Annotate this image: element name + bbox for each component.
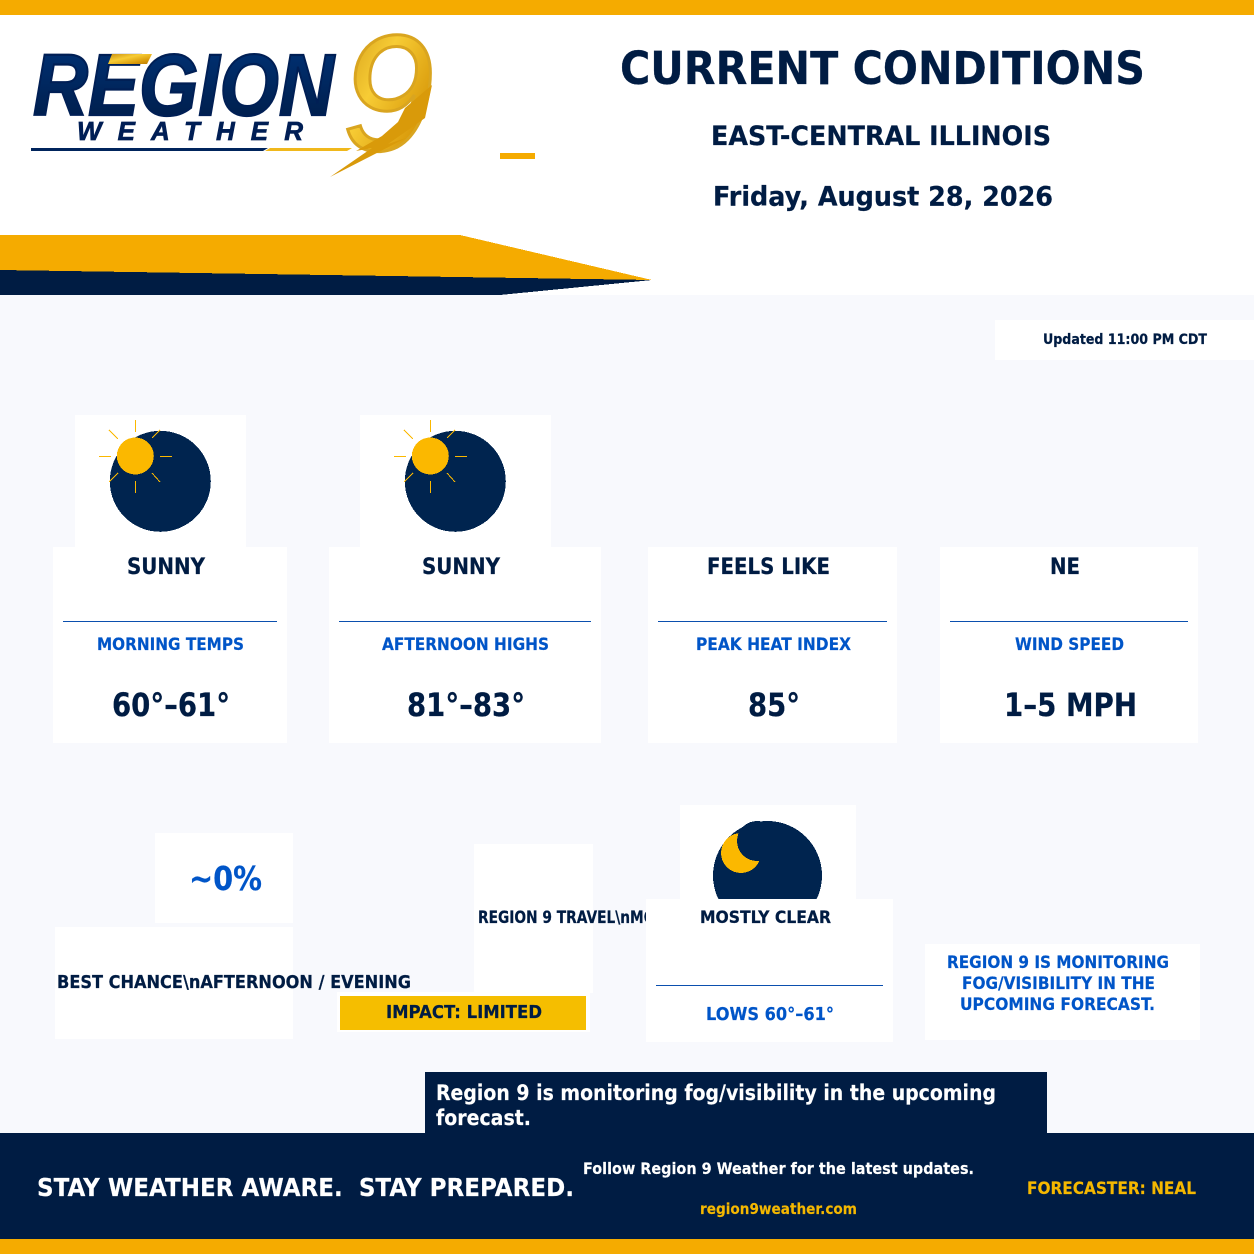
panel: morning temps: SUNNY [127, 555, 206, 580]
logo: Region 9 Weather: 9 [342, 1, 434, 185]
panel: feels like: 85° [748, 686, 800, 724]
logo: Region 9 Weather: REGION [33, 37, 336, 134]
panel: overnight lows: MOSTLY CLEAR [700, 908, 831, 928]
panel: fog note: UPCOMING FORECAST. [960, 995, 1155, 1015]
panel: afternoon highs: SUNNY [422, 555, 501, 580]
panel: fog note: FOG/VISIBILITY IN THE [962, 974, 1155, 994]
impact badge [337, 992, 590, 1032]
panel: afternoon highs: 81°–83° [407, 686, 525, 724]
panel: feels like [648, 547, 897, 743]
footer: Follow Region 9 Weather for the latest updates. [583, 1159, 974, 1178]
updated time badge [995, 320, 1254, 360]
footer: STAY WEATHER AWARE. STAY PREPARED. [37, 1173, 574, 1202]
subtitle: region: EAST-CENTRAL ILLINOIS [711, 121, 1051, 152]
icon: sunny afternoon [360, 415, 551, 547]
alert banner: Region 9 is monitoring fog/visibility in the upcoming [436, 1081, 996, 1105]
panel: afternoon highs [329, 547, 601, 743]
logo: Region 9 Weather [31, 1, 434, 185]
panel: feels like: FEELS LIKE [707, 555, 830, 580]
rain chance value: ~0% [189, 859, 262, 898]
panel: wind: NE [1050, 555, 1080, 580]
footer: FORECASTER: NEAL [1027, 1179, 1196, 1199]
panel: morning temps [53, 547, 287, 743]
panel: wind: 1–5 MPH [1004, 686, 1137, 724]
icon: sunny morning [75, 415, 246, 547]
footer: region9weather.com [700, 1200, 857, 1218]
date: Friday, August 28, 2026 [713, 182, 1053, 212]
panel: overnight lows [646, 899, 893, 1042]
alert banner: forecast. [436, 1106, 531, 1130]
panel: morning temps: MORNING TEMPS [97, 635, 244, 655]
panel: feels like: PEAK HEAT INDEX [696, 635, 851, 655]
best chance label: BEST CHANCE\nAFTERNOON / EVENING [57, 972, 411, 993]
travel outlook [474, 844, 732, 993]
panel: fog note: REGION 9 IS MONITORING [947, 953, 1169, 973]
travel outlook: REGION 9 TRAVEL\nMONITORING [478, 908, 732, 927]
panel: wind [940, 547, 1198, 743]
panel: fog note [925, 944, 1200, 1040]
panel: morning temps: 60°–61° [112, 686, 230, 724]
accent dash [500, 153, 535, 159]
title: CURRENT CONDITIONS [620, 42, 1145, 95]
header band [0, 0, 1254, 295]
footer [0, 1133, 1254, 1254]
icon: moon [680, 805, 856, 930]
panel: overnight lows: LOWS 60°–61° [706, 1004, 834, 1025]
header wedge [0, 235, 652, 295]
rain chance value [155, 833, 293, 923]
alert banner [425, 1072, 1047, 1134]
panel: wind: WIND SPEED [1015, 635, 1124, 655]
updated time badge: Updated 11:00 PM CDT [1043, 332, 1207, 348]
logo: Region 9 Weather: WEATHER [77, 116, 303, 146]
panel: afternoon highs: AFTERNOON HIGHS [382, 635, 549, 655]
impact badge: IMPACT: LIMITED [386, 1002, 542, 1023]
best chance label [55, 927, 411, 1039]
